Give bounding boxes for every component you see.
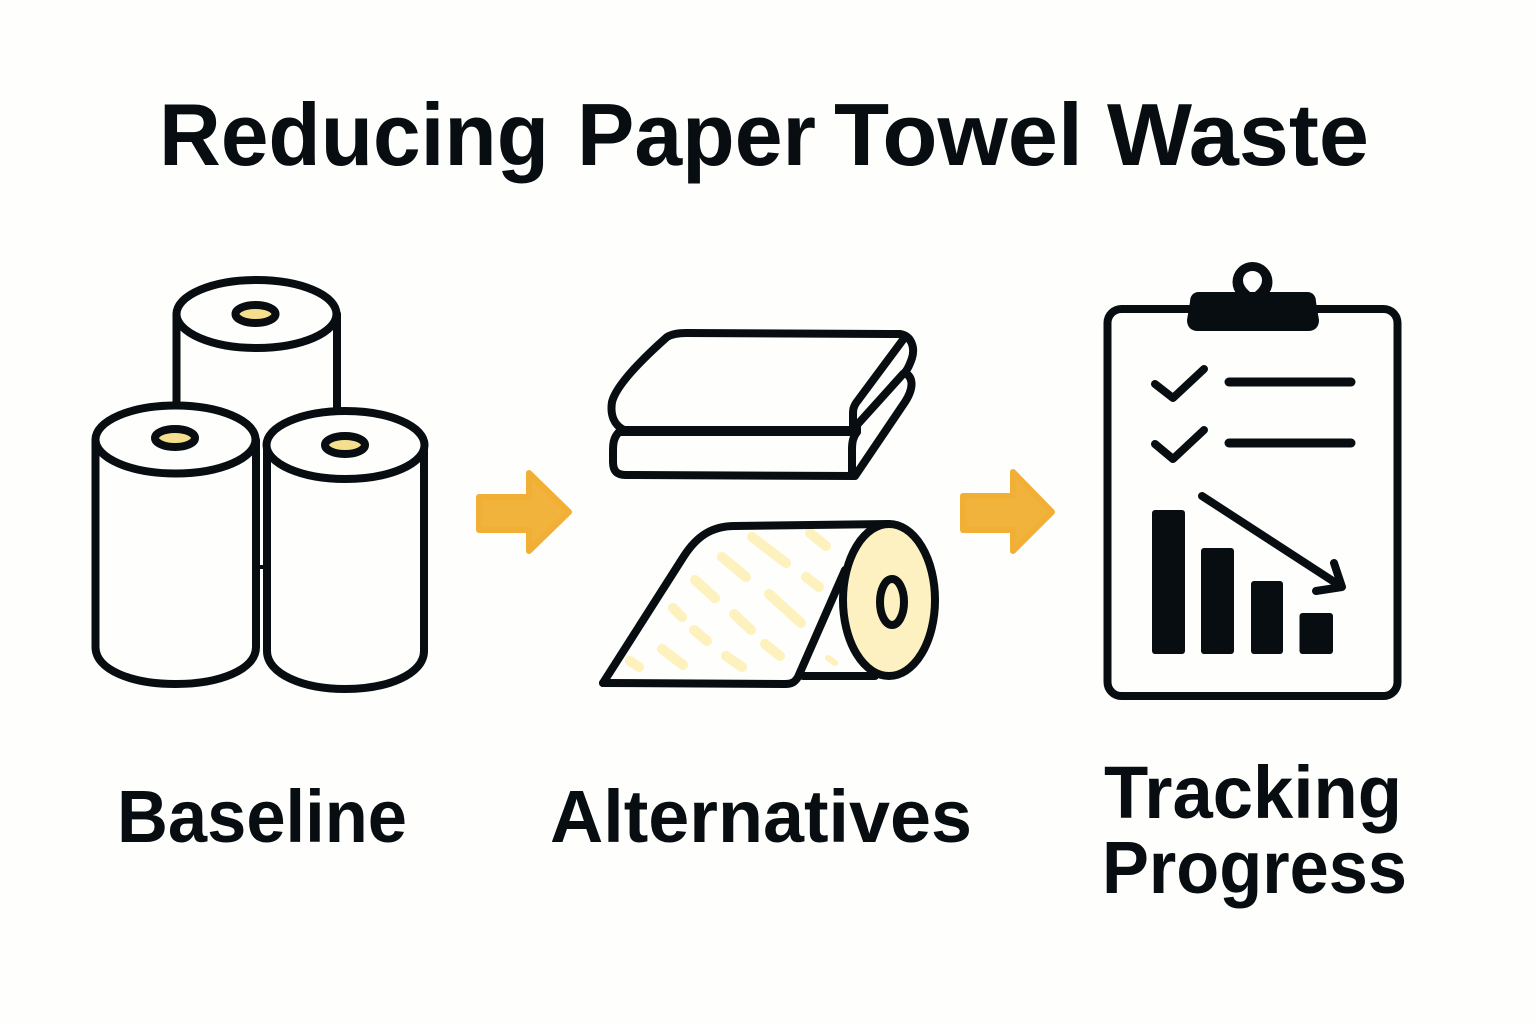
label: tracking progress [1102, 751, 1407, 909]
label: tracking progress: Tracking [1104, 751, 1402, 834]
clip [1187, 262, 1319, 331]
label: alternatives: Alternatives [550, 775, 972, 858]
icon: stacked paper towel rolls [96, 280, 424, 689]
title: Paper [577, 85, 816, 184]
bar chart [1152, 510, 1333, 654]
clipboard body [1108, 309, 1398, 696]
downward trend arrow [1202, 496, 1342, 591]
title: Waste [1107, 85, 1369, 184]
towel pattern [630, 533, 835, 667]
title: Towel [834, 85, 1083, 184]
icon: clipboard with checklist and declining chart [1108, 262, 1398, 696]
right roll [266, 411, 424, 689]
icon: folded towels [612, 333, 913, 476]
icon: patterned paper towel roll [603, 524, 935, 684]
left roll [96, 406, 256, 684]
arrow: alternatives to tracking [963, 472, 1052, 551]
arrow: baseline to alternatives [479, 473, 569, 551]
label: tracking progress: Progress [1102, 826, 1407, 909]
title [159, 85, 1369, 184]
title: Reducing [159, 85, 549, 184]
label: baseline: Baseline [117, 775, 407, 858]
checklist [1155, 369, 1351, 459]
back roll [176, 280, 337, 408]
